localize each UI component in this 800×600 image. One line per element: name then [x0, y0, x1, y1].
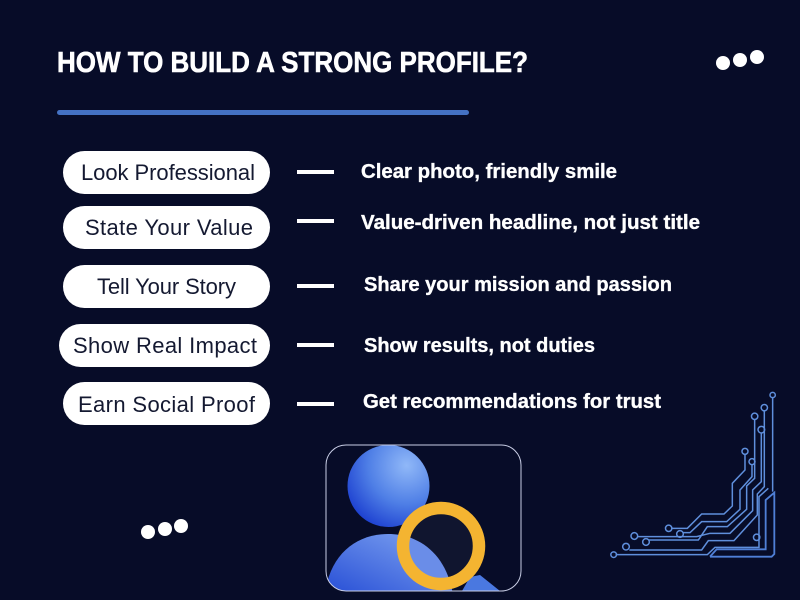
icon: three dots top right: [716, 50, 764, 70]
title: HOW TO BUILD A STRONG PROFILE?: [57, 47, 528, 79]
step 2: state your value: State Your Value: [85, 215, 253, 240]
step 5: earn social proof: [63, 382, 661, 425]
image: profile with magnifying glass: [325, 445, 521, 595]
step 5: earn social proof: Get recommendations for trust: [363, 391, 661, 413]
icon: three dots bottom left: [141, 519, 188, 539]
step 2: state your value: Value-driven headline, not just title: [361, 212, 700, 234]
step 3: tell your story: Share your mission and passion: [364, 274, 672, 296]
title underline: [57, 110, 469, 115]
step 2: state your value: [63, 206, 700, 249]
step 4: show real impact: [59, 324, 595, 367]
step 4: show real impact: Show Real Impact: [73, 333, 257, 358]
step 1: look professional: Look Professional: [81, 160, 255, 185]
decoration: circuit board traces: [611, 392, 775, 557]
step 3: tell your story: [63, 265, 672, 308]
step 1: look professional: Clear photo, friendly smile: [361, 161, 617, 183]
step 1: look professional: [63, 151, 617, 194]
step 5: earn social proof: Earn Social Proof: [78, 392, 256, 417]
step 3: tell your story: Tell Your Story: [97, 274, 236, 299]
step 4: show real impact: Show results, not duties: [364, 335, 595, 357]
